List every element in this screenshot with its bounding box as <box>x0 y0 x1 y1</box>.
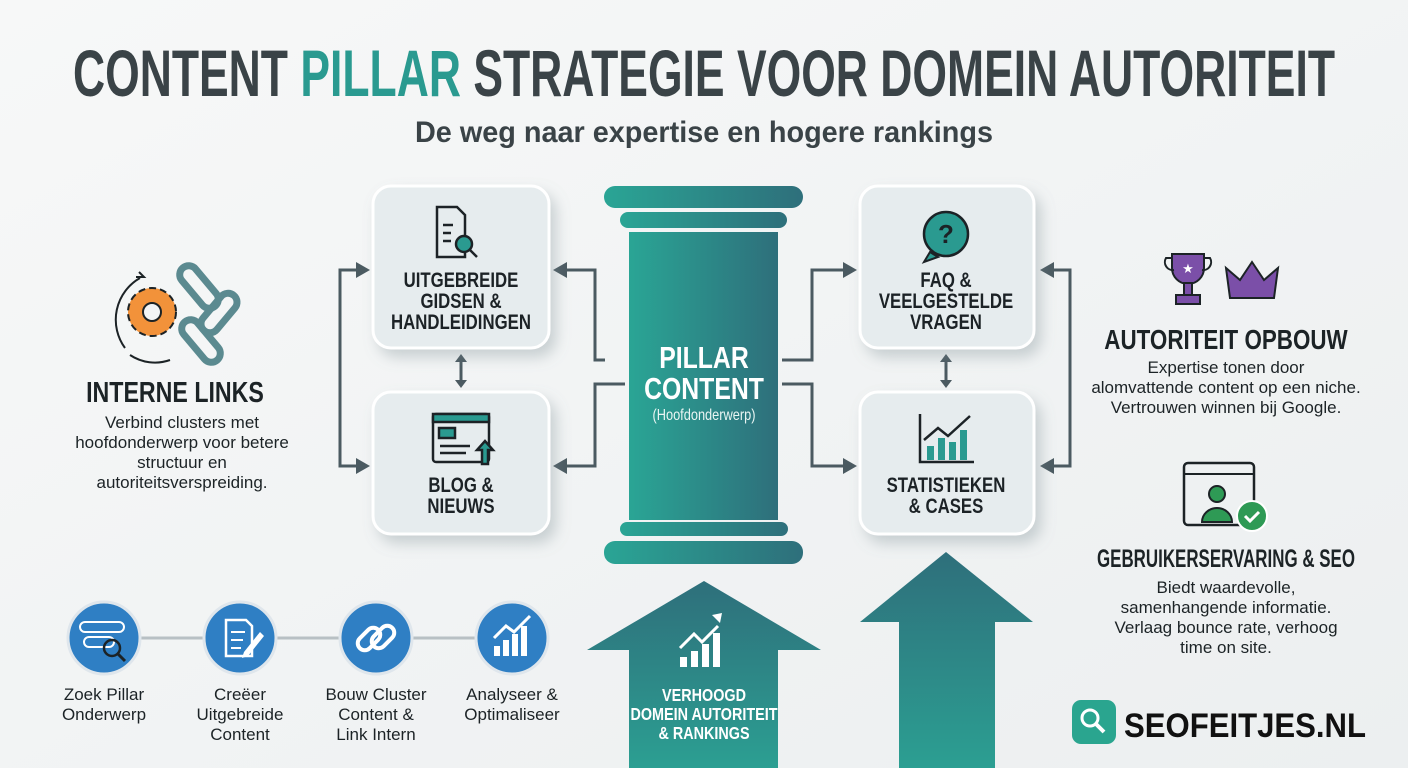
logo: SEOFEITJES.NL <box>1124 707 1366 745</box>
step 3: Content & <box>338 705 414 724</box>
icon: growth chart <box>680 613 722 667</box>
step 3: Link Intern <box>336 725 416 744</box>
icon: browser upload <box>433 414 493 464</box>
panel: guides <box>373 186 549 348</box>
pillar <box>604 186 803 564</box>
icon: bar chart <box>920 414 974 462</box>
text: autoriteit <box>1091 358 1361 417</box>
step 3: Bouw Cluster <box>325 685 427 704</box>
pillar: (Hoofdonderwerp) <box>652 407 756 424</box>
panel: faq <box>860 186 1034 348</box>
text: ux seo: Biedt waardevolle, <box>1157 578 1295 597</box>
panel: guides: GIDSEN & <box>420 290 502 314</box>
step 4: Analyseer & <box>466 685 558 704</box>
icon: document search <box>437 207 477 257</box>
heading: autoriteit opbouw: AUTORITEIT OPBOUW <box>1104 325 1348 356</box>
text: autoriteit: Expertise tonen door <box>1148 358 1305 377</box>
arrow: domain authority: DOMEIN AUTORITEIT <box>630 705 778 724</box>
heading: interne links: INTERNE LINKS <box>86 375 264 409</box>
icon: trophy and crown: ★ <box>1182 261 1194 276</box>
text: interne links: structuur en <box>137 453 227 472</box>
panel: blog: NIEUWS <box>427 495 495 519</box>
panel: faq: VRAGEN <box>910 311 982 335</box>
step 2 <box>197 602 283 744</box>
logo <box>1072 700 1366 745</box>
icon: user browser check <box>1184 463 1267 531</box>
arrow: second upward <box>860 552 1033 768</box>
panel: faq: VEELGESTELDE <box>879 290 1013 314</box>
icon: gear and chain <box>116 262 241 366</box>
panel: blog: BLOG & <box>428 474 494 498</box>
arrow: domain authority: & RANKINGS <box>658 724 750 743</box>
arrow: domain authority: VERHOOGD <box>662 686 746 705</box>
step 1: Zoek Pillar <box>64 685 144 704</box>
icon: question bubble <box>924 212 968 262</box>
panel: blog <box>373 392 549 534</box>
icon: trophy and crown <box>1165 254 1278 304</box>
step 1 <box>62 602 146 724</box>
icon: question bubble: ? <box>938 219 954 249</box>
step 1: Onderwerp <box>62 705 146 724</box>
text: interne links <box>75 413 289 492</box>
panel: faq: FAQ & <box>920 269 972 293</box>
text: ux seo: samenhangende informatie. <box>1121 598 1331 617</box>
step 4: Optimaliseer <box>464 705 560 724</box>
text: autoriteit: alomvattende content op een niche. <box>1091 378 1361 397</box>
panel: stats: STATISTIEKEN <box>887 474 1005 498</box>
step 2: Content <box>210 725 270 744</box>
step 4 <box>464 602 560 724</box>
panel: guides: HANDLEIDINGEN <box>391 311 531 335</box>
panel: guides: UITGEBREIDE <box>404 269 518 293</box>
text: interne links: hoofdonderwerp voor betere <box>75 433 289 452</box>
connector arrows <box>340 270 1070 466</box>
text: interne links: Verbind clusters met <box>105 413 259 432</box>
step 2: Uitgebreide <box>197 705 283 724</box>
panel: stats: & CASES <box>909 495 983 519</box>
pillar: CONTENT <box>644 371 764 406</box>
step 2: Creëer <box>214 685 266 704</box>
text: ux seo: time on site. <box>1180 638 1272 657</box>
text: ux seo: Verlaag bounce rate, verhoog <box>1114 618 1338 637</box>
pillar: PILLAR <box>659 340 749 375</box>
arrow: domain authority <box>587 581 821 768</box>
panel: stats <box>860 392 1034 534</box>
subtitle: De weg naar expertise en hogere rankings <box>415 116 993 149</box>
text: autoriteit: Vertrouwen winnen bij Google. <box>1111 398 1341 417</box>
text: interne links: autoriteitsverspreiding. <box>96 473 268 492</box>
text: ux seo <box>1114 578 1338 657</box>
process steps <box>62 602 560 744</box>
step 3 <box>325 602 427 744</box>
